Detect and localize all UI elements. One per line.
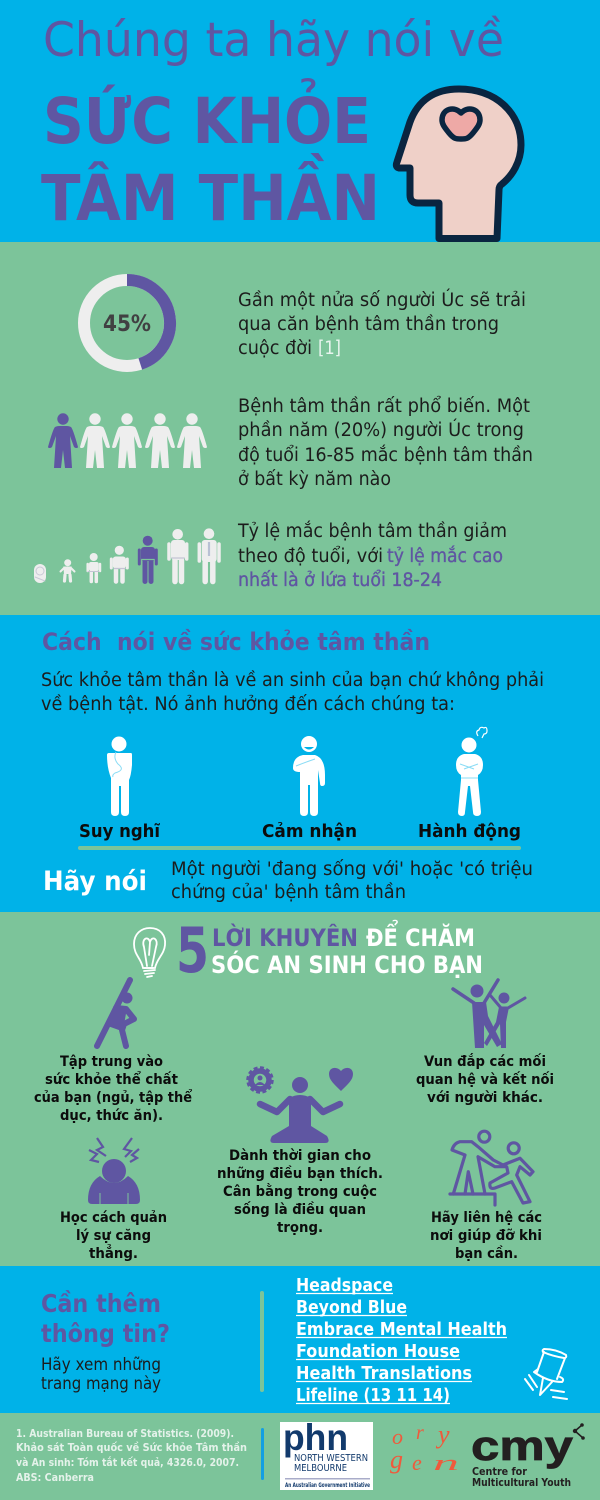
list: web links bbox=[296, 1275, 507, 1406]
text: relationships tip bbox=[416, 1053, 554, 1106]
text: prevalence statistic: độ tuổi 16-85 mắc bệnh tâm thần bbox=[238, 445, 533, 466]
list: web links: Lifeline (13 11 14) bbox=[296, 1385, 450, 1406]
text: relationships tip: quan hệ và kết nối bbox=[416, 1071, 554, 1088]
icon: head with heart bbox=[396, 89, 521, 238]
panel: footer bbox=[0, 1413, 600, 1500]
text: lifetime statistic: qua căn bệnh tâm thần trong bbox=[238, 314, 499, 335]
logo: Orygen: y bbox=[435, 1420, 450, 1449]
icon: acting person bbox=[456, 727, 487, 816]
icon: five people, one highlighted bbox=[48, 413, 207, 468]
text: preferred language: chứng của' bệnh tâm thần bbox=[171, 882, 406, 903]
text: physical health tip: Tập trung vào bbox=[60, 1054, 163, 1070]
logo: Orygen: r bbox=[416, 1422, 424, 1444]
text: balance tip: những điều bạn thích. bbox=[217, 1165, 383, 1182]
text: stress tip bbox=[60, 1210, 167, 1262]
list: web links: Embrace Mental Health bbox=[296, 1319, 507, 1340]
label: say: Hãy nói bbox=[43, 866, 147, 897]
logo: Centre for Multicultural Youth: Multicultural Youth bbox=[472, 1477, 571, 1489]
text: reference: ABS: Canberra bbox=[16, 1471, 94, 1484]
text: stress tip: Học cách quản bbox=[60, 1210, 167, 1226]
logo: PHN North Western Melbourne: An Australian Government Initiative bbox=[285, 1481, 370, 1489]
text: physical health tip: sức khỏe thể chất bbox=[45, 1071, 178, 1088]
icon: life stages row bbox=[34, 528, 219, 583]
label: thinking: Suy nghĩ bbox=[79, 821, 161, 842]
panel: how to talk about mental health bbox=[0, 615, 600, 912]
icon: feeling person bbox=[293, 736, 325, 816]
logo: Centre for Multicultural Youth: cmy bbox=[471, 1422, 574, 1469]
text: balance tip: sống là điều quan bbox=[234, 1201, 366, 1218]
text: seek help tip bbox=[430, 1210, 542, 1262]
panel: five tips bbox=[0, 912, 600, 1266]
paragraph: về bệnh tật. Nó ảnh hưởng đến cách chúng ta: bbox=[41, 694, 455, 715]
text: prevalence statistic bbox=[238, 396, 533, 490]
heading: need more info: Cần thêm bbox=[41, 1289, 161, 1318]
big number 5: 5 bbox=[176, 914, 209, 987]
text: physical health tip: của bạn (ngủ, tập thể bbox=[34, 1089, 192, 1106]
text: reference: 1. Australian Bureau of Statistics. (2009). bbox=[16, 1427, 234, 1440]
text: reference: Khảo sát Toàn quốc về Sức khỏe Tâm thần bbox=[16, 1441, 247, 1454]
icon: meditating person with gear and heart bbox=[248, 1068, 353, 1143]
text: see these sites: Hãy xem những bbox=[41, 1355, 161, 1375]
text: age statistic: tỷ lệ mắc cao bbox=[387, 546, 503, 567]
label: feeling: Cảm nhận bbox=[262, 821, 357, 842]
text: lifetime statistic: [1] bbox=[318, 338, 341, 359]
logo: PHN North Western Melbourne: MELBOURNE bbox=[294, 1463, 347, 1474]
text: lifetime statistic: cuộc đời bbox=[238, 338, 312, 359]
text: stress tip: thẳng. bbox=[89, 1244, 138, 1262]
logo: Orygen: e bbox=[412, 1450, 422, 1475]
panel: title header bbox=[0, 0, 600, 242]
text: balance tip: Cân bằng trong cuộc bbox=[223, 1183, 377, 1200]
text: reference: và An sinh: Tóm tắt kết quả, 4326.0, 2007. bbox=[16, 1456, 239, 1469]
logo: Orygen: o bbox=[392, 1424, 403, 1449]
logo: Orygen: n bbox=[433, 1450, 459, 1475]
text: balance tip bbox=[217, 1148, 383, 1236]
icon: two people dancing bbox=[453, 980, 525, 1048]
logo: PHN North Western Melbourne: phn bbox=[283, 1417, 348, 1458]
icon: stressed person bbox=[88, 1138, 140, 1204]
text: lifetime statistic bbox=[238, 289, 526, 359]
text: age statistic bbox=[237, 521, 507, 591]
text: reference bbox=[16, 1427, 247, 1484]
donut value: 45% bbox=[103, 312, 151, 337]
list: web links: Headspace bbox=[296, 1275, 393, 1296]
title line: intro: Chúng ta hãy nói về bbox=[43, 13, 504, 68]
heading: tips: LỜI KHUYÊN bbox=[212, 922, 358, 952]
label: acting: Hành động bbox=[418, 821, 521, 842]
text: see these sites: trang mạng này bbox=[41, 1374, 161, 1394]
panel: statistics bbox=[0, 242, 600, 615]
text: stress tip: lý sự căng bbox=[76, 1228, 151, 1244]
text: prevalence statistic: phần năm (20%) người Úc trong bbox=[238, 419, 524, 441]
heading: need more info bbox=[41, 1289, 170, 1348]
text: relationships tip: Vun đắp các mối bbox=[424, 1053, 546, 1070]
logo: PHN North Western Melbourne bbox=[280, 1417, 373, 1490]
text: physical health tip bbox=[34, 1054, 192, 1124]
text: age statistic: theo độ tuổi, với bbox=[238, 546, 383, 567]
logo: Orygen bbox=[390, 1420, 459, 1475]
chart: 45 percent donut bbox=[84, 280, 170, 366]
icon: light bulb bbox=[134, 928, 165, 977]
text: relationships tip: với người khác. bbox=[427, 1090, 543, 1106]
heading: tips: SÓC AN SINH CHO BẠN bbox=[211, 949, 483, 979]
logo: PHN North Western Melbourne: NORTH WESTERN bbox=[294, 1453, 368, 1464]
heading: Cách nói về sức khỏe tâm thần bbox=[42, 628, 430, 656]
list: web links: Beyond Blue bbox=[296, 1297, 407, 1318]
text: lifetime statistic: Gần một nửa số người Úc sẽ trải bbox=[238, 289, 526, 311]
text: age statistic: nhất là ở lứa tuổi 18-24 bbox=[238, 570, 442, 591]
list: web links: Foundation House bbox=[296, 1341, 460, 1362]
text: see these sites bbox=[41, 1355, 161, 1394]
logo: Orygen: g bbox=[390, 1445, 403, 1474]
text: physical health tip: dục, thức ăn). bbox=[60, 1108, 163, 1124]
text: prevalence statistic: Bệnh tâm thần rất phổ biến. Một bbox=[238, 396, 530, 417]
logo: Centre for Multicultural Youth: Centre for bbox=[472, 1466, 528, 1478]
icon: thinking person bbox=[107, 736, 132, 816]
text: seek help tip: nơi giúp đỡ khi bbox=[430, 1228, 542, 1244]
text: balance tip: Dành thời gian cho bbox=[229, 1148, 371, 1164]
text: seek help tip: Hãy liên hệ các bbox=[431, 1210, 542, 1226]
icon: stretching figure bbox=[97, 980, 134, 1046]
heading: need more info: thông tin? bbox=[41, 1319, 170, 1348]
heading: tips bbox=[211, 918, 483, 979]
text: prevalence statistic: ở bất kỳ năm nào bbox=[238, 469, 391, 490]
text: age statistic: Tỷ lệ mắc bệnh tâm thần giảm bbox=[237, 521, 507, 542]
title line: TÂM THẦN: TÂM THẦN bbox=[41, 154, 380, 235]
panel: more information bbox=[0, 1266, 600, 1413]
list: web links: Health Translations bbox=[296, 1363, 472, 1384]
text: preferred language bbox=[171, 859, 533, 903]
heading: tips: ĐỂ CHĂM bbox=[366, 918, 475, 952]
paragraph: Sức khỏe tâm thần là về an sinh của bạn chứ không phải bbox=[41, 670, 544, 691]
icon: person helping another bbox=[450, 1131, 533, 1205]
logo: Centre for Multicultural Youth bbox=[471, 1422, 585, 1489]
icon: push pin bbox=[525, 1349, 567, 1399]
paragraph bbox=[41, 670, 544, 715]
text: preferred language: Một người 'đang sống với' hoặc 'có triệu bbox=[171, 859, 533, 880]
text: balance tip: trọng. bbox=[277, 1220, 323, 1236]
text: seek help tip: bạn cần. bbox=[455, 1245, 518, 1262]
title line: SỨC KHỎE: SỨC KHỎE bbox=[43, 79, 371, 158]
